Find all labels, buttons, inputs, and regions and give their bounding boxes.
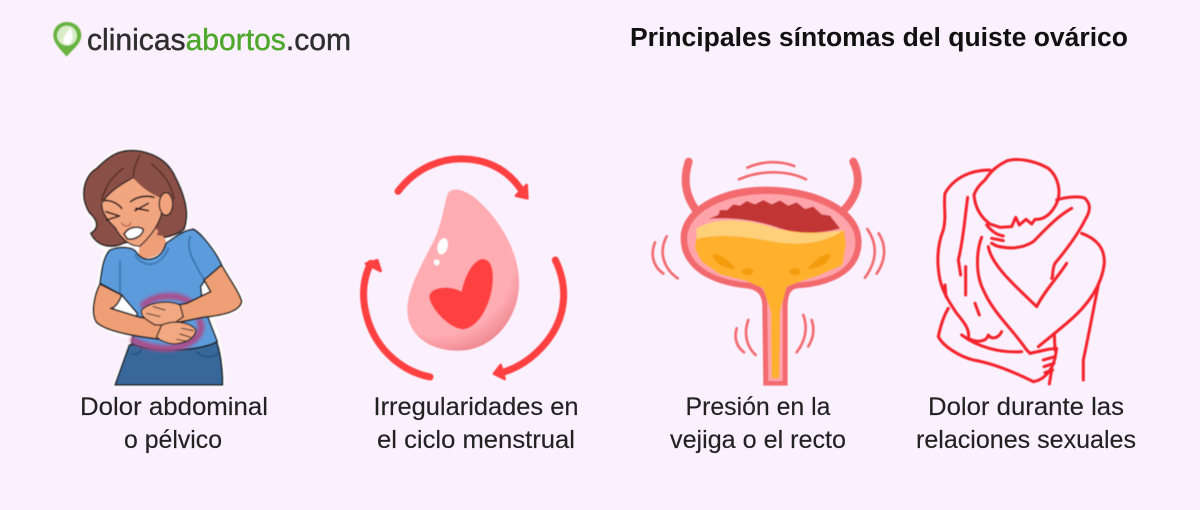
icon: woman holding her abdomen: [84, 150, 242, 385]
drop highlights: [434, 237, 450, 265]
icon: embracing couple line drawing: [938, 160, 1104, 384]
hair back: [84, 150, 187, 246]
icon: bladder: [653, 162, 884, 386]
logo: [53, 22, 351, 57]
mouth with gritted teeth: [124, 227, 143, 239]
panel: abdominal pain: [80, 150, 268, 454]
label: bladder pressure: vejiga o el recto: [670, 426, 846, 454]
woman white sticker outline: [84, 151, 242, 385]
title: Principales síntomas del quiste ovárico: [630, 24, 1128, 52]
panel: pain during sex: [916, 160, 1136, 454]
arm right: [168, 265, 242, 323]
shirt shading: [120, 237, 203, 293]
panel: bladder pressure: [653, 162, 884, 454]
abdominal pain glow: [133, 296, 201, 348]
hair strands: [102, 155, 174, 200]
label: menstrual irregularities: el ciclo menstrual: [377, 426, 575, 454]
urine shadows: [713, 254, 831, 275]
hands: [141, 302, 183, 325]
ear: [159, 193, 173, 215]
urine: [695, 224, 846, 378]
blood drop: [407, 190, 519, 351]
heart: [429, 259, 493, 329]
face: [102, 177, 163, 246]
nose: [122, 223, 131, 226]
label: pain during sex: Dolor durante las: [928, 393, 1124, 421]
arm left: [93, 284, 168, 339]
eyes and brows: [105, 196, 154, 220]
label: abdominal pain: o pélvico: [124, 426, 222, 454]
vibration lines: [653, 162, 884, 355]
finger lines: [147, 307, 193, 341]
urine light layer: [697, 220, 844, 244]
shirt: [100, 229, 222, 350]
dark red mass: [708, 200, 840, 232]
label: pain during sex: relaciones sexuales: [916, 426, 1136, 454]
jeans: [115, 340, 223, 385]
hair front: [100, 160, 179, 236]
bladder wall: [681, 187, 862, 386]
jeans details: [132, 348, 218, 357]
bladder inner lining: [687, 194, 855, 381]
label: menstrual irregularities: Irregularidades en: [374, 393, 578, 421]
arrowheads: [366, 185, 527, 379]
panel: menstrual irregularities: [364, 159, 578, 454]
neck: [139, 227, 166, 258]
label: bladder pressure: Presión en la: [686, 393, 831, 421]
icon: cycle with blood drop and heart: [364, 159, 564, 379]
icon: location pin: [53, 22, 81, 57]
label: abdominal pain: Dolor abdominal: [80, 393, 268, 421]
logo wordmark: clinicasabortos.com: [87, 22, 351, 57]
cycle arrows: [364, 159, 564, 377]
ureters: [686, 162, 858, 210]
